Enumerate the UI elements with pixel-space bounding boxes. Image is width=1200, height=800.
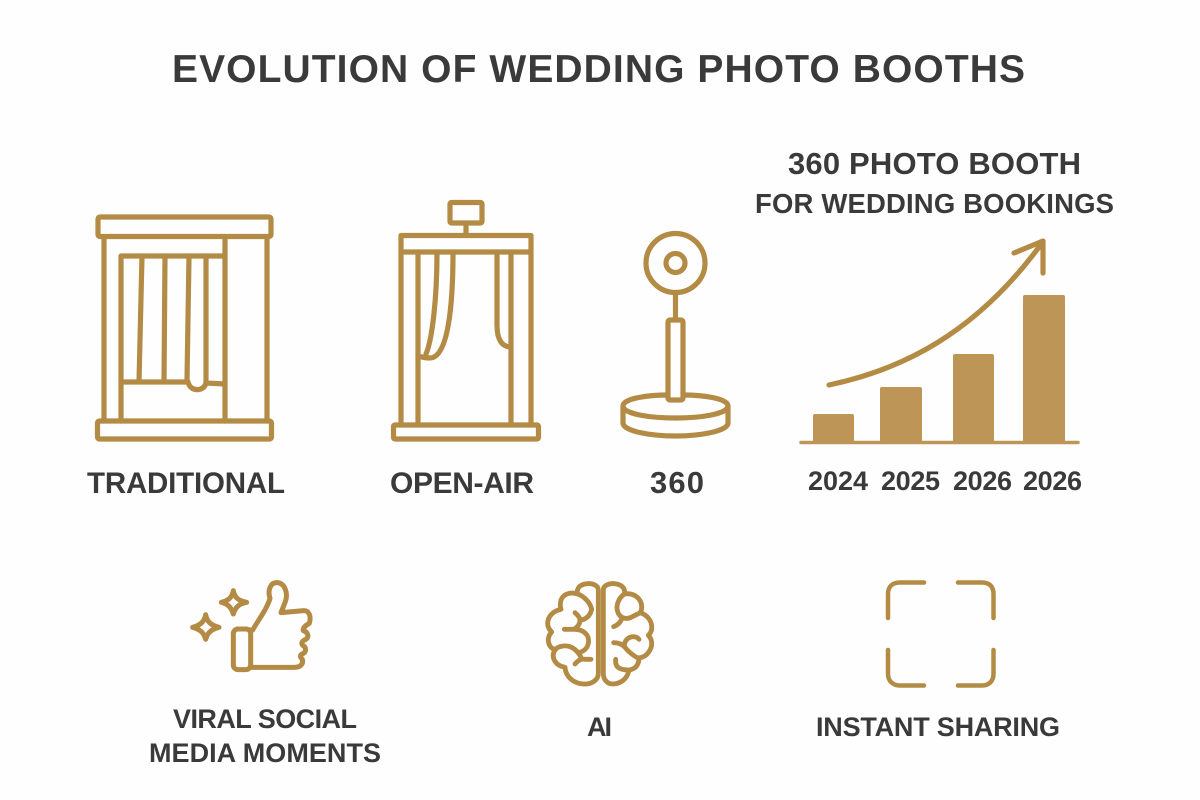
axis labels: years	[808, 466, 1082, 496]
label: viral social media moments: VIRAL SOCIAL	[173, 704, 357, 734]
bar 2024	[813, 414, 854, 443]
label: instant sharing: INSTANT SHARING	[816, 712, 1060, 742]
sparkle small	[193, 615, 219, 639]
axis labels: years: 2026	[953, 466, 1012, 496]
axis labels: years: 2025	[881, 466, 940, 496]
label: viral social media moments	[149, 704, 381, 768]
label: traditional: TRADITIONAL	[87, 467, 285, 500]
bar 2026	[953, 354, 994, 443]
bar 2025	[880, 387, 922, 443]
icon: open-air photo booth	[394, 202, 538, 439]
icon: 360 photo booth	[623, 234, 728, 436]
icon: thumbs up with sparkles	[193, 583, 310, 670]
sparkle large	[221, 591, 247, 614]
arrow: upward trend	[829, 241, 1043, 385]
bar chart: bookings growth	[801, 241, 1078, 443]
heading: chart title: FOR WEDDING BOOKINGS	[755, 188, 1114, 219]
label: AI: AI	[587, 712, 612, 742]
curtain folds	[121, 256, 225, 390]
bar 2026 second	[1023, 295, 1065, 443]
axis labels: years: 2026	[1023, 466, 1082, 496]
curtains	[418, 252, 511, 358]
label: open-air: OPEN-AIR	[390, 467, 534, 500]
axis labels: years: 2024	[808, 466, 868, 496]
title: EVOLUTION OF WEDDING PHOTO BOOTHS	[172, 48, 1025, 91]
label: 360: 360	[650, 465, 704, 500]
heading: chart title	[755, 146, 1114, 219]
icon: traditional photo booth	[98, 217, 272, 439]
label: viral social media moments: MEDIA MOMENTS	[149, 738, 381, 768]
heading: chart title: 360 PHOTO BOOTH	[788, 146, 1081, 181]
icon: instant sharing frame	[888, 582, 994, 686]
icon: brain	[548, 584, 652, 684]
